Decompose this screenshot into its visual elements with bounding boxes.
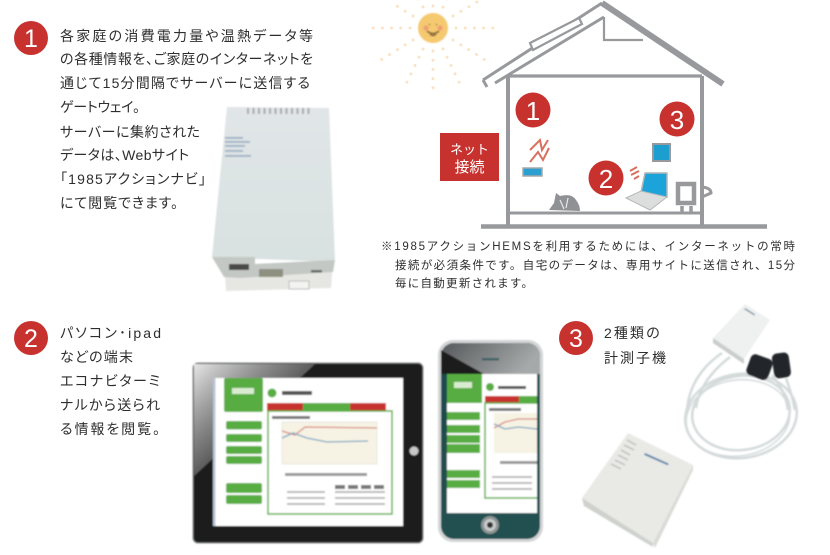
house marker 3 [660,102,694,136]
note text: ※1985アクションHEMSを利用するためには、インターネットの常時 [381,240,796,253]
icon: wireless signal and gateway [523,140,549,176]
text block: gateway description: 各家庭の消費電力量や温熱データ等 [60,28,313,44]
note text: 毎に自動更新されます。 [395,276,533,290]
text block: gateway description: ゲートウェイ。 [60,99,140,115]
text block: gateway description: 通じて15分間隔でサーバーに送信する [60,75,310,91]
text block: gateway description: にて閲覧できます。 [60,195,178,211]
text block: gateway description [60,28,313,211]
photo: sensor with cables and clamps [680,304,802,465]
text block: viewing devices: などの端末 [60,349,133,365]
smartphone with dashboard [438,340,543,542]
icon: laptop [626,167,667,210]
text block: viewing devices: る情報を閲覧。 [60,421,160,437]
badge 2: 2 [24,325,38,353]
badge 3 [559,321,593,355]
note text: 接続が必須条件です。自宅のデータは、専用サイトに送信され、15分 [395,258,796,272]
house marker 3: 3 [670,105,684,135]
badge 2 [14,321,48,355]
text block: viewing devices: エコナビターミ [60,373,160,389]
note text [381,240,796,290]
house marker 2 [588,160,624,196]
icon: cat [549,193,580,211]
house illustration [481,3,767,226]
icon: water heater [678,184,711,212]
icon: sensor box [653,144,670,161]
net connection label: 接続 [454,159,485,176]
house marker 1 [516,92,550,128]
photo: gateway device [212,107,335,291]
icon: sun [372,0,494,92]
text block: measuring units: 2種類の [604,325,660,341]
text block: measuring units: 計測子機 [604,350,666,366]
house marker 2: 2 [599,164,613,194]
text block: gateway description: データは、Webサイト [60,147,189,163]
text block: viewing devices [60,325,161,437]
text block: viewing devices: パソコン･ipad [60,325,161,341]
net connection label: ネット [450,142,489,157]
badge 1 [14,21,48,55]
photo: measuring unit box [582,433,693,548]
text block: gateway description: サーバーに集約された [60,124,200,140]
tablet with dashboard [193,363,423,543]
text block: viewing devices: ナルから送られ [60,397,160,413]
net connection label [440,133,499,181]
badge 3: 3 [569,325,583,353]
badge 1: 1 [24,25,38,53]
text block: gateway description: 「1985アクションナビ」 [60,171,206,187]
text block: measuring units [604,325,666,366]
text block: gateway description: の各種情報を、ご家庭のインターネットを [60,51,313,67]
house marker 1: 1 [526,96,540,126]
